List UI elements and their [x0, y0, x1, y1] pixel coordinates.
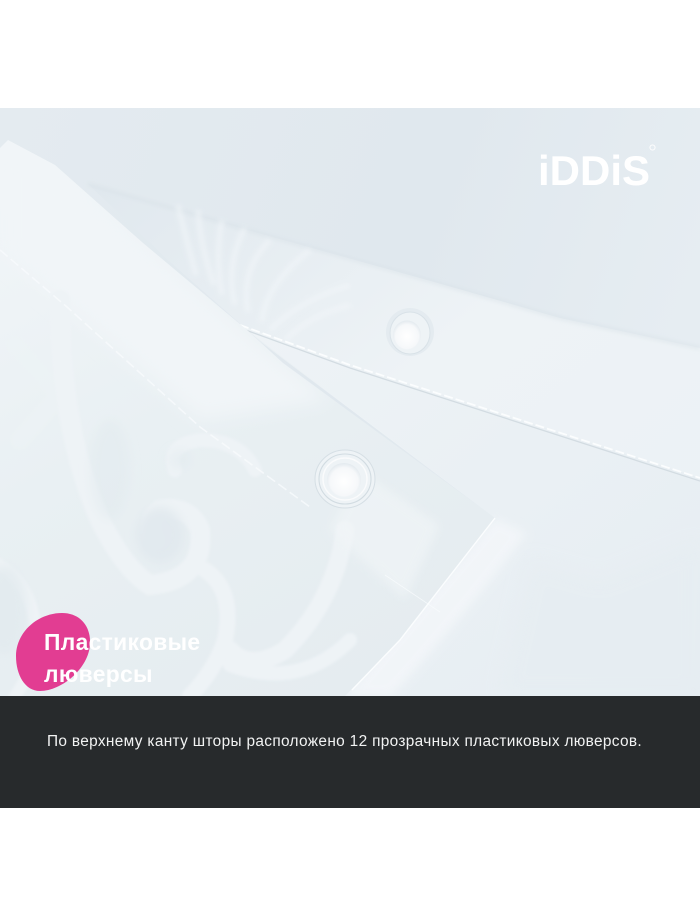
heading: Пластиковые	[44, 629, 200, 655]
grommet: upper	[386, 308, 434, 356]
shaded pockets inside the ornament	[3, 510, 175, 586]
caption text: По верхнему канту шторы расположено 12 прозрачных пластиковых люверсов.	[47, 733, 642, 750]
photo: curtain with plastic grommets	[0, 108, 700, 696]
leaf pattern on the hem	[178, 208, 200, 218]
back curtain layer	[0, 108, 700, 512]
brand logo: IDDIS: iDDiS	[538, 147, 650, 194]
top front highlight	[201, 364, 294, 404]
front layer edge stitches	[16, 342, 496, 691]
swirl ornament on the front layer	[185, 620, 355, 696]
middle hem layer	[260, 260, 637, 468]
lower hem band below the stitch	[240, 325, 700, 696]
heading: люверсы	[44, 661, 153, 687]
soft highlight beside the front fold	[361, 527, 516, 690]
shadow under the back layer edge	[88, 184, 700, 348]
heading	[44, 629, 200, 687]
front curtain layer	[0, 140, 495, 696]
hem stitch line	[240, 325, 700, 481]
pink blob	[16, 613, 90, 691]
caption band	[0, 696, 700, 808]
fold highlights of the front layer	[330, 470, 440, 600]
grommet: lower	[315, 450, 375, 508]
